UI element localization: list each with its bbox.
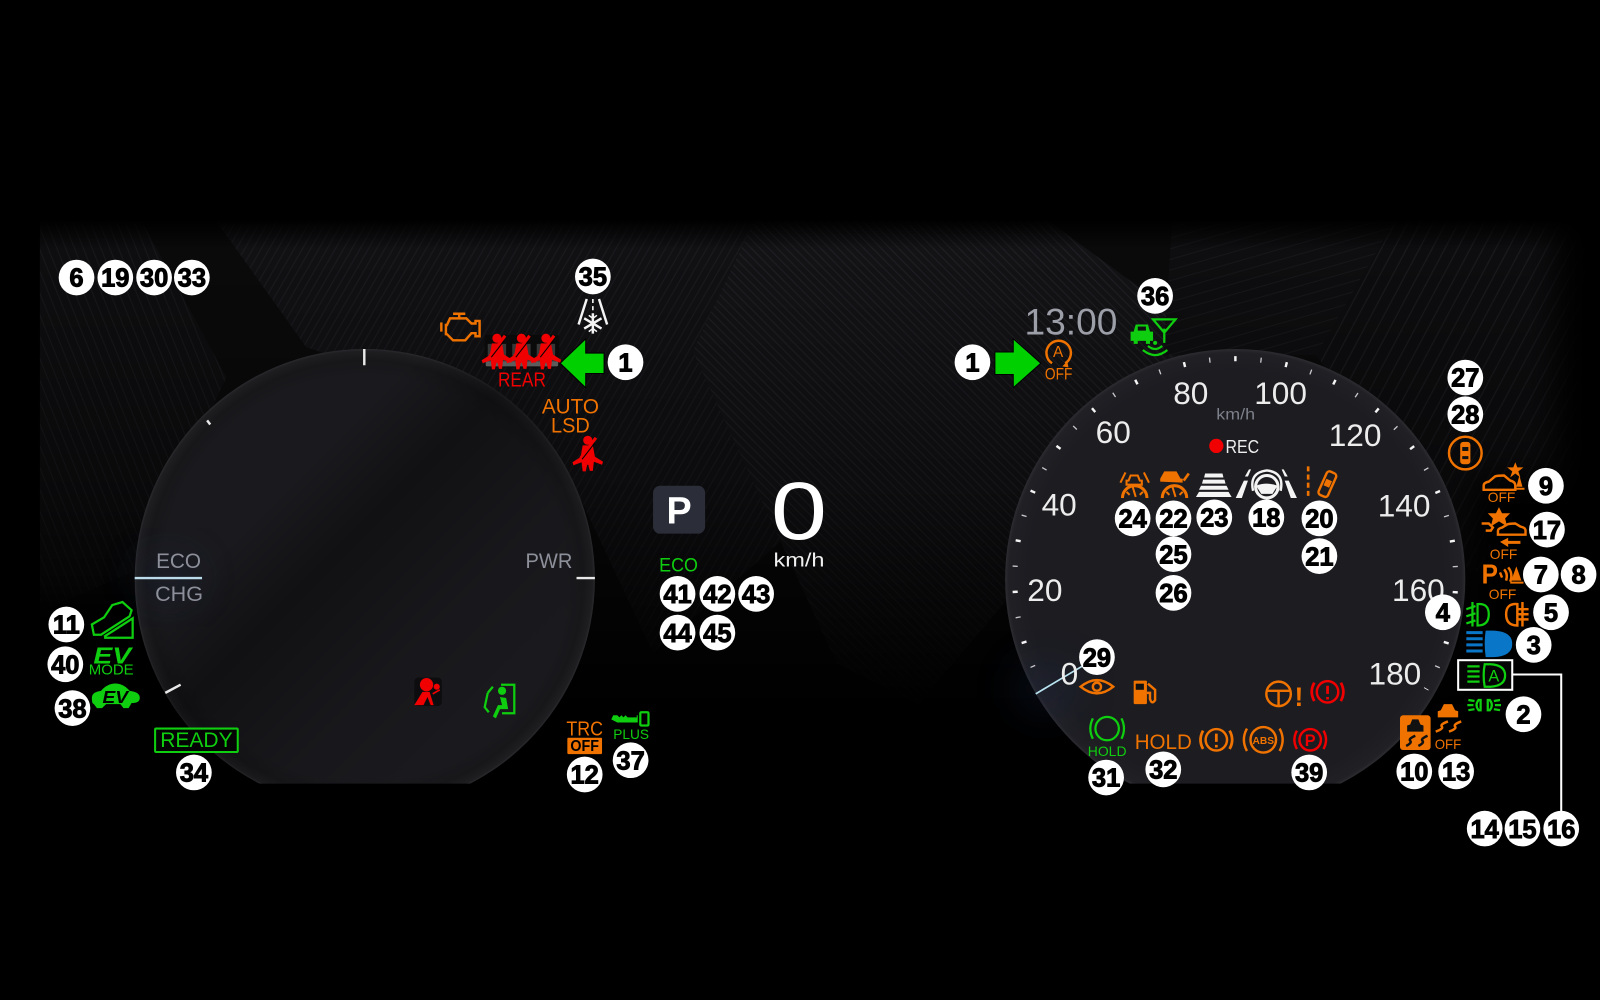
label: AUTO LSD: LSD	[551, 414, 590, 438]
number badges: 45	[703, 620, 732, 648]
digital speed readout	[771, 466, 827, 571]
number badges: 34	[180, 760, 209, 788]
number badges: 19	[101, 265, 129, 293]
number badges: 1	[618, 349, 633, 377]
gear indicator P	[653, 486, 705, 534]
number badges: 3	[1527, 632, 1541, 660]
number badges: 16	[1547, 816, 1575, 844]
icon: snow road	[579, 299, 607, 334]
icon: key PLUS: PLUS	[613, 727, 649, 743]
icon: collision warning off 17: OFF	[1490, 547, 1518, 563]
speed scale numbers: 20	[1027, 572, 1062, 608]
icon: cruise A OFF: OFF	[1045, 366, 1072, 384]
icon: TRC OFF	[566, 719, 603, 755]
number badges: 1	[965, 349, 980, 377]
icon: airbag	[414, 678, 442, 706]
icon: watch eye	[1081, 680, 1113, 693]
icon: parking brake: P	[1305, 732, 1316, 750]
icon: parking sonar off: P	[1482, 559, 1498, 590]
icon: red brake warning	[1312, 681, 1343, 703]
icon: VSC off: OFF	[1435, 737, 1461, 753]
number badges: 23	[1200, 505, 1228, 533]
icon: EV MODE: EV	[93, 642, 134, 668]
number badges: 41	[663, 581, 692, 609]
number badges: 25	[1159, 541, 1188, 569]
number badges: 13	[1442, 759, 1470, 787]
number badges: 35	[579, 264, 607, 292]
number badges: 43	[742, 581, 770, 609]
speed scale numbers: 120	[1329, 417, 1381, 453]
icon: high beam	[1466, 631, 1512, 657]
number badges: 22	[1159, 506, 1188, 534]
icon: automatic high beam box: A	[1488, 668, 1499, 686]
number badges: 6	[69, 265, 84, 293]
label: AUTO LSD	[542, 394, 599, 438]
number badges: 2	[1516, 701, 1531, 729]
dashboard background panel	[40, 226, 1564, 636]
label: AUTO LSD: AUTO	[542, 394, 599, 418]
number badges: 8	[1571, 562, 1586, 590]
number badges: 33	[178, 265, 206, 293]
left power gauge	[135, 349, 595, 809]
speed scale numbers: 180	[1369, 656, 1421, 692]
icon: precrash off 9: OFF	[1488, 490, 1516, 506]
number badges: 11	[53, 612, 80, 640]
speed scale numbers: 60	[1096, 414, 1131, 450]
icon: green brake hold	[1088, 717, 1127, 760]
number badges: 7	[1534, 562, 1548, 590]
icon: key PLUS	[611, 712, 649, 743]
number badges: 26	[1159, 580, 1188, 608]
icon: parking sonar off	[1482, 559, 1523, 603]
ECO mode indicator: ECO	[659, 554, 698, 576]
icon: rear seatbelts	[482, 334, 561, 369]
icon: parking brake	[1294, 729, 1326, 751]
number badges	[51, 264, 1586, 844]
number badges: 42	[703, 581, 732, 609]
speed scale numbers: 40	[1042, 486, 1077, 522]
right speedometer	[1005, 349, 1465, 809]
icon: TRC OFF: TRC	[566, 719, 603, 741]
icon: READY: READY	[160, 728, 233, 752]
icon: orange brake warning	[1201, 729, 1232, 751]
icon: driver seatbelt	[572, 436, 603, 471]
icon: precrash off 9	[1484, 462, 1524, 506]
icon: parking sonar off: OFF	[1489, 587, 1517, 603]
icon: incline car	[92, 602, 133, 638]
icon: cruise A OFF	[1045, 341, 1072, 384]
icon: seat occupant	[485, 685, 514, 718]
number badges: 28	[1451, 401, 1479, 429]
number badges: 9	[1539, 473, 1553, 501]
number badges: 17	[1533, 517, 1561, 545]
speed scale numbers: 0	[1061, 656, 1078, 692]
gear indicator P: P	[666, 489, 692, 531]
icon: front fog lamp	[1466, 602, 1489, 627]
label: CHG: CHG	[155, 582, 203, 606]
icon: crossing stripes	[1196, 473, 1232, 497]
number badges: 14	[1471, 816, 1500, 844]
number badges: 38	[58, 695, 87, 723]
number badges: 21	[1305, 543, 1334, 571]
number badges: 37	[616, 747, 645, 775]
speed scale numbers	[1027, 375, 1445, 692]
icon: side lights	[1467, 700, 1501, 710]
icon: VSC off	[1435, 704, 1461, 753]
icon: dial with car 22	[1160, 471, 1189, 498]
icon: lane departure top view	[1308, 466, 1337, 499]
icon: EV MODE	[89, 642, 134, 678]
label: PWR: PWR	[526, 549, 572, 573]
number badges: 4	[1436, 599, 1451, 627]
icon: EV car	[92, 684, 140, 708]
number badges: 36	[1141, 283, 1169, 311]
speed unit: km/h	[773, 549, 824, 571]
icon: connected car antenna	[1131, 319, 1176, 355]
icon: EV car: EV	[103, 687, 130, 707]
icon: ABS: ABS	[1253, 736, 1274, 747]
speed scale numbers: 100	[1254, 375, 1307, 411]
number badges: 24	[1118, 506, 1148, 534]
number badges: 18	[1252, 505, 1281, 533]
icon: REC: REC	[1226, 436, 1259, 457]
icon: slip indicator	[1400, 715, 1431, 750]
left callout arrow	[560, 339, 604, 388]
right callout arrow	[995, 339, 1041, 388]
speed scale numbers: 160	[1392, 572, 1445, 608]
number badges: 40	[51, 651, 79, 679]
number badges: 5	[1544, 599, 1558, 627]
icon: steering warning	[1266, 682, 1303, 712]
icon: EV MODE: MODE	[89, 662, 134, 678]
label: orange HOLD: HOLD	[1135, 730, 1192, 754]
number badges: 29	[1083, 644, 1111, 672]
number badges: 27	[1451, 365, 1479, 393]
icon: fuel	[1134, 681, 1155, 704]
speed scale numbers: 140	[1378, 487, 1430, 523]
unit label km/h: km/h	[1216, 406, 1255, 423]
number badges: 30	[140, 265, 168, 293]
icon: steering warning: !	[1295, 682, 1303, 712]
icon: lane steering assist	[1236, 469, 1297, 498]
icon: ABS	[1244, 727, 1283, 753]
label: REAR: REAR	[498, 370, 546, 392]
ECO CHG divider	[135, 577, 202, 579]
number badges: 15	[1508, 816, 1537, 844]
number badges: 31	[1092, 765, 1120, 793]
icon: TRC OFF: OFF	[570, 738, 599, 755]
clock 13:00: 13:00	[1024, 302, 1117, 343]
icon: cruise A OFF: A	[1053, 344, 1064, 361]
icon: door top view circle	[1449, 437, 1482, 469]
number badges: 39	[1295, 760, 1323, 788]
number badges: 10	[1400, 759, 1428, 787]
number badges: 20	[1305, 506, 1334, 534]
number badges: 44	[663, 620, 693, 648]
number badges: 32	[1149, 757, 1177, 785]
icon: rear fog lamp	[1506, 602, 1529, 627]
icon: REC	[1209, 436, 1259, 457]
speedometer ticks	[1015, 359, 1456, 689]
icon: dial with car 24	[1120, 472, 1149, 498]
gauge tick marks	[165, 349, 595, 693]
icon: collision warning off 17	[1482, 507, 1526, 563]
speed needle at zero	[1036, 665, 1084, 694]
speed value: 0	[771, 466, 827, 557]
number badges: 12	[571, 762, 599, 790]
icon: green brake hold: HOLD	[1088, 744, 1127, 760]
icon: check engine	[441, 314, 480, 340]
icon: automatic high beam box	[1458, 660, 1561, 811]
speed scale numbers: 80	[1173, 375, 1208, 411]
label: ECO: ECO	[156, 549, 201, 573]
